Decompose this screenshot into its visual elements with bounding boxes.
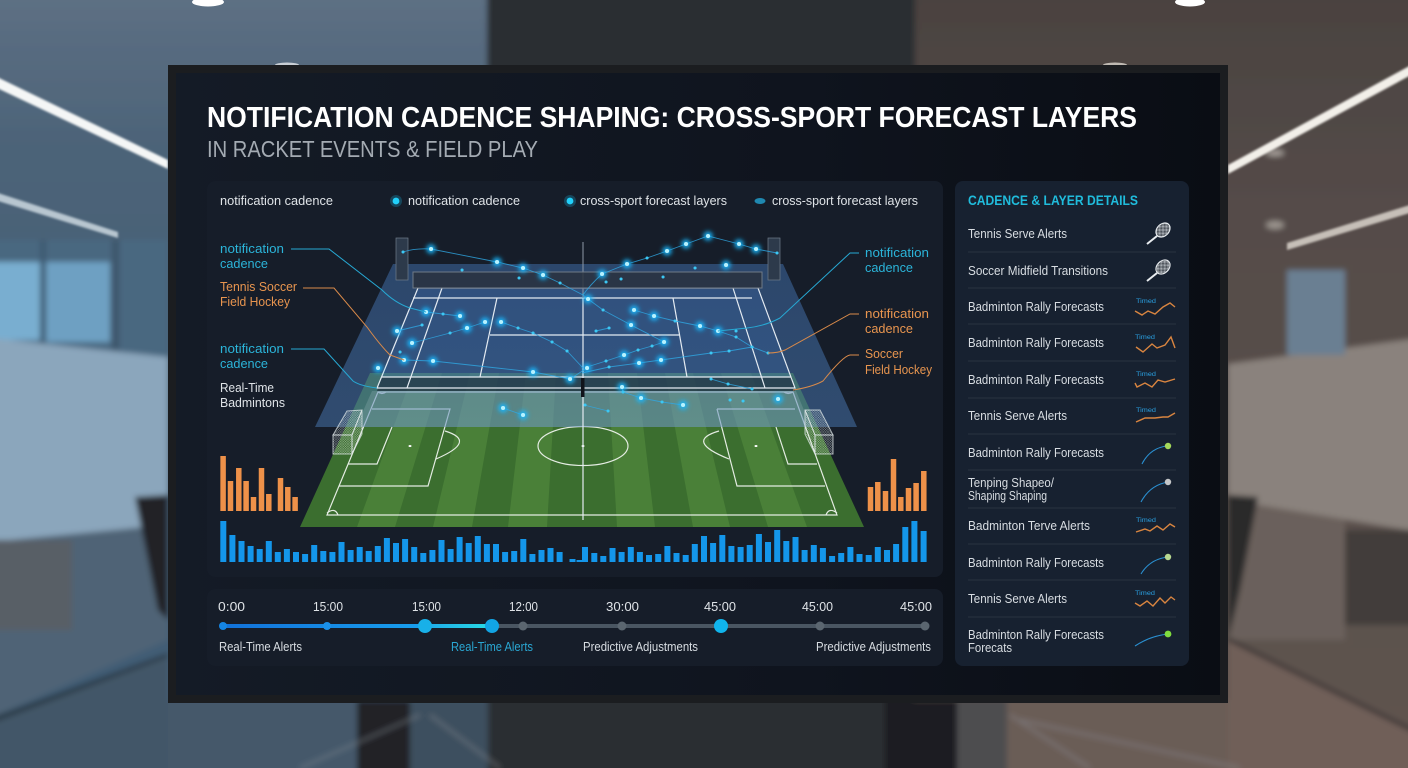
sparkline 4: [1136, 408, 1175, 422]
callout: notification cadence top left: cadence: [220, 256, 268, 271]
sparkline 5: [1136, 518, 1175, 532]
title: NOTIFICATION CADENCE SHAPING: CROSS-SPORT FORECAST LAYERS: [207, 102, 1137, 134]
callout: notification cadence orange right: cadence: [865, 321, 913, 336]
field lines: [327, 392, 837, 515]
callout: notification cadence top right: [718, 245, 929, 331]
forecast network lines: [397, 236, 777, 415]
panel: cadence and layer details: [955, 181, 1189, 666]
sparkline 5: Timed: [1136, 518, 1156, 524]
callout: soccer field hockey right: Soccer: [865, 346, 904, 361]
ceiling lamps: [192, 0, 1205, 68]
sparkline 6: Timed: [1135, 591, 1155, 597]
translucent tennis layer: [315, 238, 857, 520]
tennis court lines: [377, 288, 795, 388]
timeline phase labels: Real-Time Alerts: [219, 640, 302, 654]
icon: tennis racket 2: [1147, 257, 1173, 281]
curve indicator green: [1142, 443, 1171, 464]
callout: soccer field hockey right: [793, 346, 932, 390]
soccer field: [300, 373, 864, 527]
callout: notification cadence orange right: [768, 306, 929, 353]
net band: [377, 377, 795, 391]
forecast node glow: [378, 236, 778, 415]
time labels: 12:00: [509, 599, 538, 614]
bar chart: orange left: [223, 456, 295, 511]
timeline track: [219, 619, 930, 633]
callout: tennis soccer field hockey: Field Hockey: [220, 294, 290, 309]
callout: notification cadence top right: notification: [865, 245, 929, 260]
label: real-time badmintons: Real-Time: [220, 380, 274, 395]
row labels: Forecats: [968, 641, 1012, 655]
subtitle: IN RACKET EVENTS & FIELD PLAY: [207, 136, 538, 162]
goal left: [333, 410, 362, 454]
time labels: 0:00: [218, 599, 245, 614]
callout: notification cadence mid left: [220, 341, 377, 388]
curve indicator gray: [1141, 479, 1171, 502]
panel: field visualization: [207, 181, 943, 577]
sparkline 1: [1135, 299, 1175, 315]
row labels: Shaping Shaping: [968, 489, 1047, 503]
sparkline 6: [1135, 591, 1175, 606]
bar chart: blue cadence timeline: [223, 521, 924, 562]
time labels: 45:00: [704, 599, 736, 614]
timeline phase labels: Real-Time Alerts: [451, 640, 533, 654]
callout: notification cadence mid left: notification: [220, 341, 284, 356]
time labels: 45:00: [900, 599, 932, 614]
time labels: 45:00: [802, 599, 833, 614]
sparkline 1: Timed: [1136, 299, 1156, 305]
timeline phase labels: Predictive Adjustments: [583, 640, 698, 654]
callout: notification cadence top left: notification: [220, 241, 284, 256]
label: real-time badmintons: [220, 380, 285, 410]
time labels: 15:00: [412, 599, 441, 614]
legend row: notification cadence: [220, 193, 333, 208]
row labels: Badminton Rally Forecasts: [968, 300, 1104, 314]
callout: tennis soccer field hockey: [220, 279, 404, 360]
curve indicator bright green: [1135, 631, 1171, 646]
timeline phase labels: [219, 640, 931, 654]
callout: notification cadence top right: cadence: [865, 260, 913, 275]
ceiling light strips: [0, 64, 1408, 250]
row labels: Tennis Serve Alerts: [968, 592, 1067, 606]
callout: notification cadence orange right: notification: [865, 306, 929, 321]
time labels: 15:00: [313, 599, 343, 614]
row labels: Badminton Rally Forecasts: [968, 628, 1104, 642]
row labels: Badminton Terve Alerts: [968, 519, 1090, 533]
posts: [396, 238, 408, 280]
legend row: cross-sport forecast layers: [772, 193, 918, 208]
sparkline 2: Timed: [1135, 335, 1155, 341]
center net post: [581, 378, 584, 397]
row labels: Badminton Rally Forecasts: [968, 556, 1104, 570]
callout: notification cadence mid left: cadence: [220, 356, 268, 371]
bar chart: orange right: [870, 459, 924, 511]
legend row: notification cadence: [408, 193, 520, 208]
timeline phase labels: Predictive Adjustments: [816, 640, 931, 654]
legend row: cross-sport forecast layers: [580, 193, 727, 208]
sparkline 2: [1135, 335, 1175, 352]
panel heading: CADENCE & LAYER DETAILS: [968, 193, 1138, 208]
row labels: Tenping Shapeo/: [968, 476, 1054, 490]
sparkline 3: [1135, 372, 1175, 387]
forecast nodes: [378, 236, 778, 415]
icon: tennis racket 1: [1147, 220, 1173, 244]
monitor frame: [168, 65, 1228, 703]
row labels: Badminton Rally Forecasts: [968, 373, 1104, 387]
time labels: [218, 599, 932, 614]
label: real-time badmintons: Badmintons: [220, 395, 285, 410]
far net: [413, 272, 762, 288]
row labels: [968, 227, 1108, 655]
goal right: [805, 410, 833, 454]
sparkline 3: Timed: [1136, 372, 1156, 378]
legend row: [220, 193, 918, 208]
minor forecast nodes: [400, 252, 777, 411]
time labels: 30:00: [606, 599, 639, 614]
sparkline 4: Timed: [1136, 408, 1156, 414]
row separators: [968, 252, 1176, 617]
row labels: Badminton Rally Forecasts: [968, 336, 1104, 350]
callout: soccer field hockey right: Field Hockey: [865, 362, 932, 377]
callout: notification cadence top left: [220, 241, 426, 312]
row labels: Tennis Serve Alerts: [968, 409, 1067, 423]
row labels: Soccer Midfield Transitions: [968, 264, 1108, 278]
curve indicator pale green: [1141, 554, 1171, 574]
panel: timeline: [207, 589, 943, 666]
callout: tennis soccer field hockey: Tennis Soccer: [220, 279, 298, 294]
row labels: Badminton Rally Forecasts: [968, 446, 1104, 460]
row labels: Tennis Serve Alerts: [968, 227, 1067, 241]
screen: [176, 73, 1220, 695]
